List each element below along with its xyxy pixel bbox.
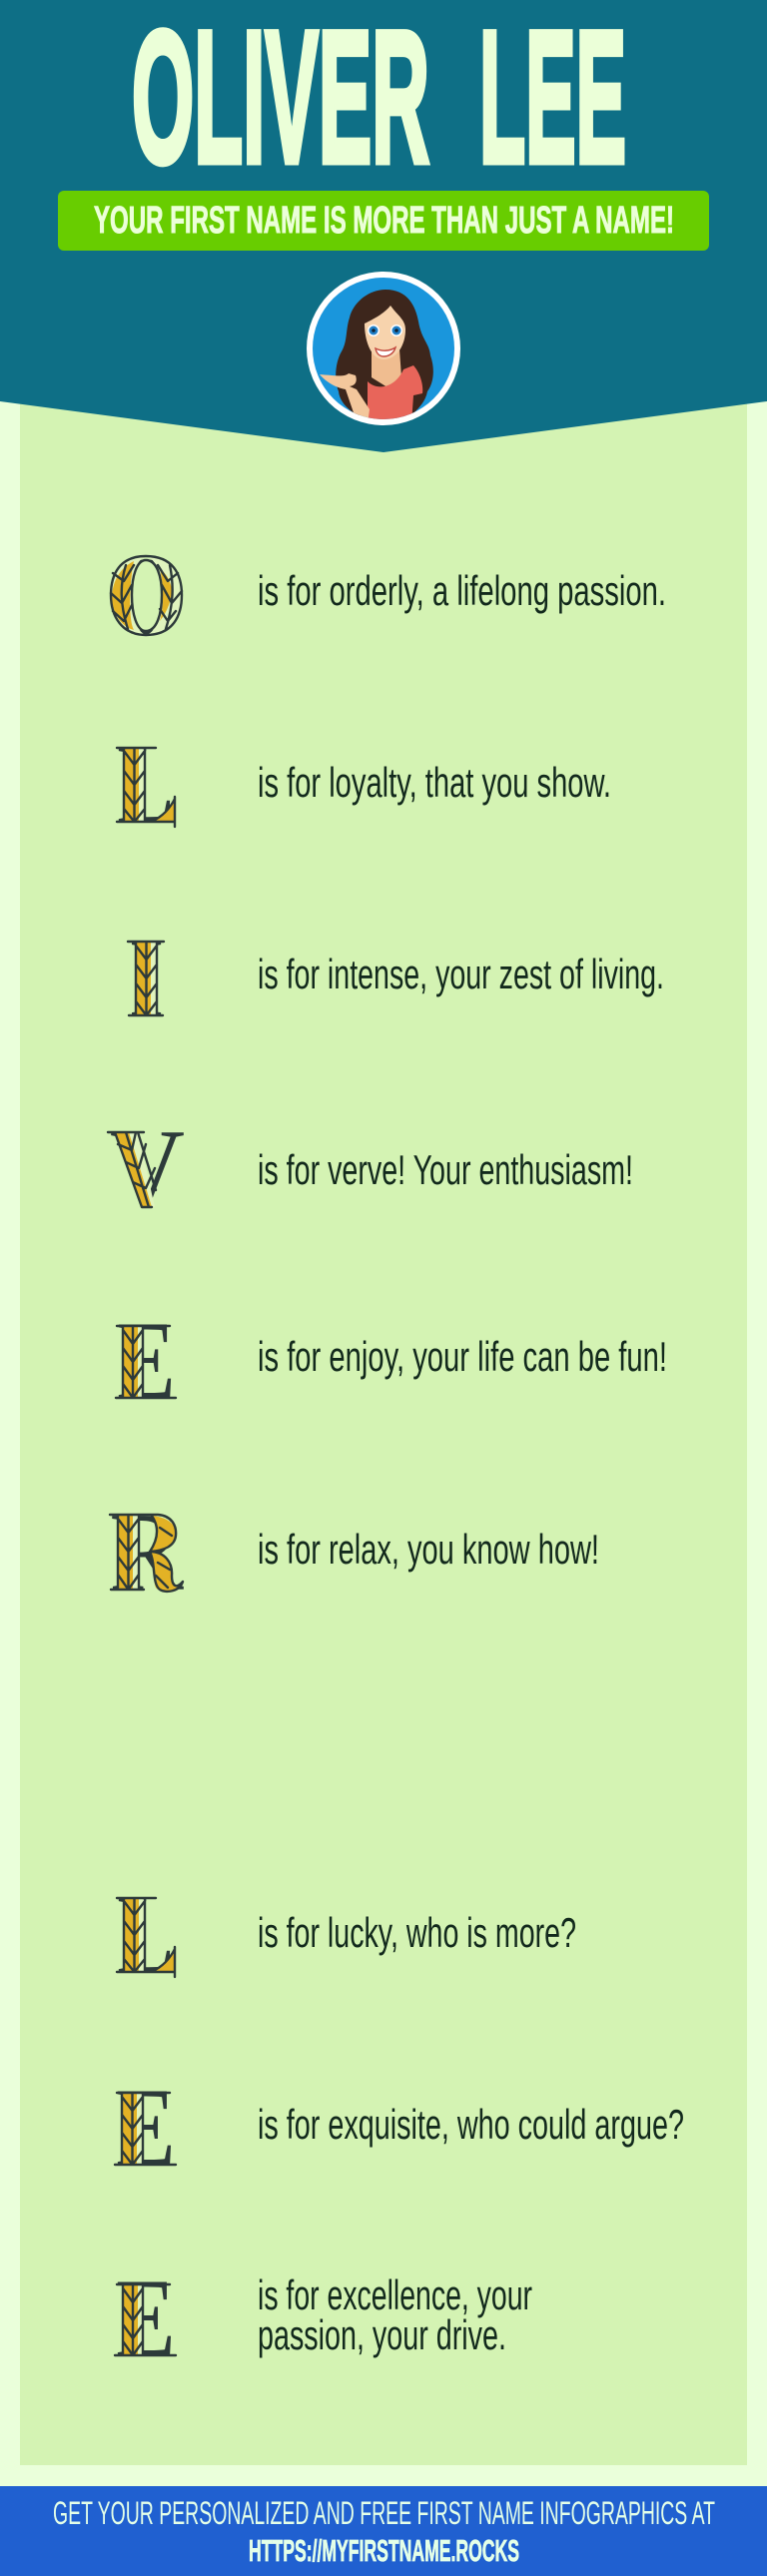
neck xyxy=(372,349,401,387)
text: two lines xyxy=(258,2271,532,2358)
arm and hand xyxy=(320,373,370,417)
tagline bar xyxy=(58,191,709,251)
letter row L (surname) xyxy=(116,1873,576,1997)
hair xyxy=(336,290,433,415)
letter L: L xyxy=(116,1873,176,1997)
header banner xyxy=(0,0,767,452)
letter row R xyxy=(109,1491,599,1614)
text: two lines: passion, your drive. xyxy=(258,2311,506,2358)
letter E: E xyxy=(116,1299,176,1423)
text: is for relax, you know how! xyxy=(258,1526,599,1573)
letter row L xyxy=(116,723,611,847)
letter O: O xyxy=(108,535,185,659)
letter row E (final) xyxy=(115,2256,532,2380)
eyes xyxy=(368,324,380,336)
footer link: HTTPS://MYFIRSTNAME.ROCKS xyxy=(249,2533,519,2568)
letter I: I xyxy=(128,917,165,1040)
shirt xyxy=(368,365,422,424)
letter V: V xyxy=(110,1107,185,1231)
letter row E xyxy=(116,1299,667,1423)
letter row V xyxy=(108,1107,633,1231)
letter row O xyxy=(108,535,666,659)
letter E: E xyxy=(115,2256,176,2380)
mouth xyxy=(376,347,395,356)
panel: letters background xyxy=(20,379,747,2465)
header xyxy=(0,0,767,452)
text: two lines: is for excellence, your xyxy=(258,2271,532,2318)
text: is for lucky, who is more? xyxy=(258,1909,576,1956)
footer xyxy=(0,2486,767,2576)
text: is for loyalty, that you show. xyxy=(258,759,611,806)
letter L: L xyxy=(116,723,176,847)
letter R: R xyxy=(109,1491,184,1614)
letter row I xyxy=(128,917,664,1040)
avatar: woman in circle xyxy=(307,272,460,425)
letter row E (surname) xyxy=(115,2066,684,2190)
face xyxy=(365,306,405,359)
letter E: E xyxy=(115,2066,176,2190)
footer background xyxy=(0,2486,767,2576)
